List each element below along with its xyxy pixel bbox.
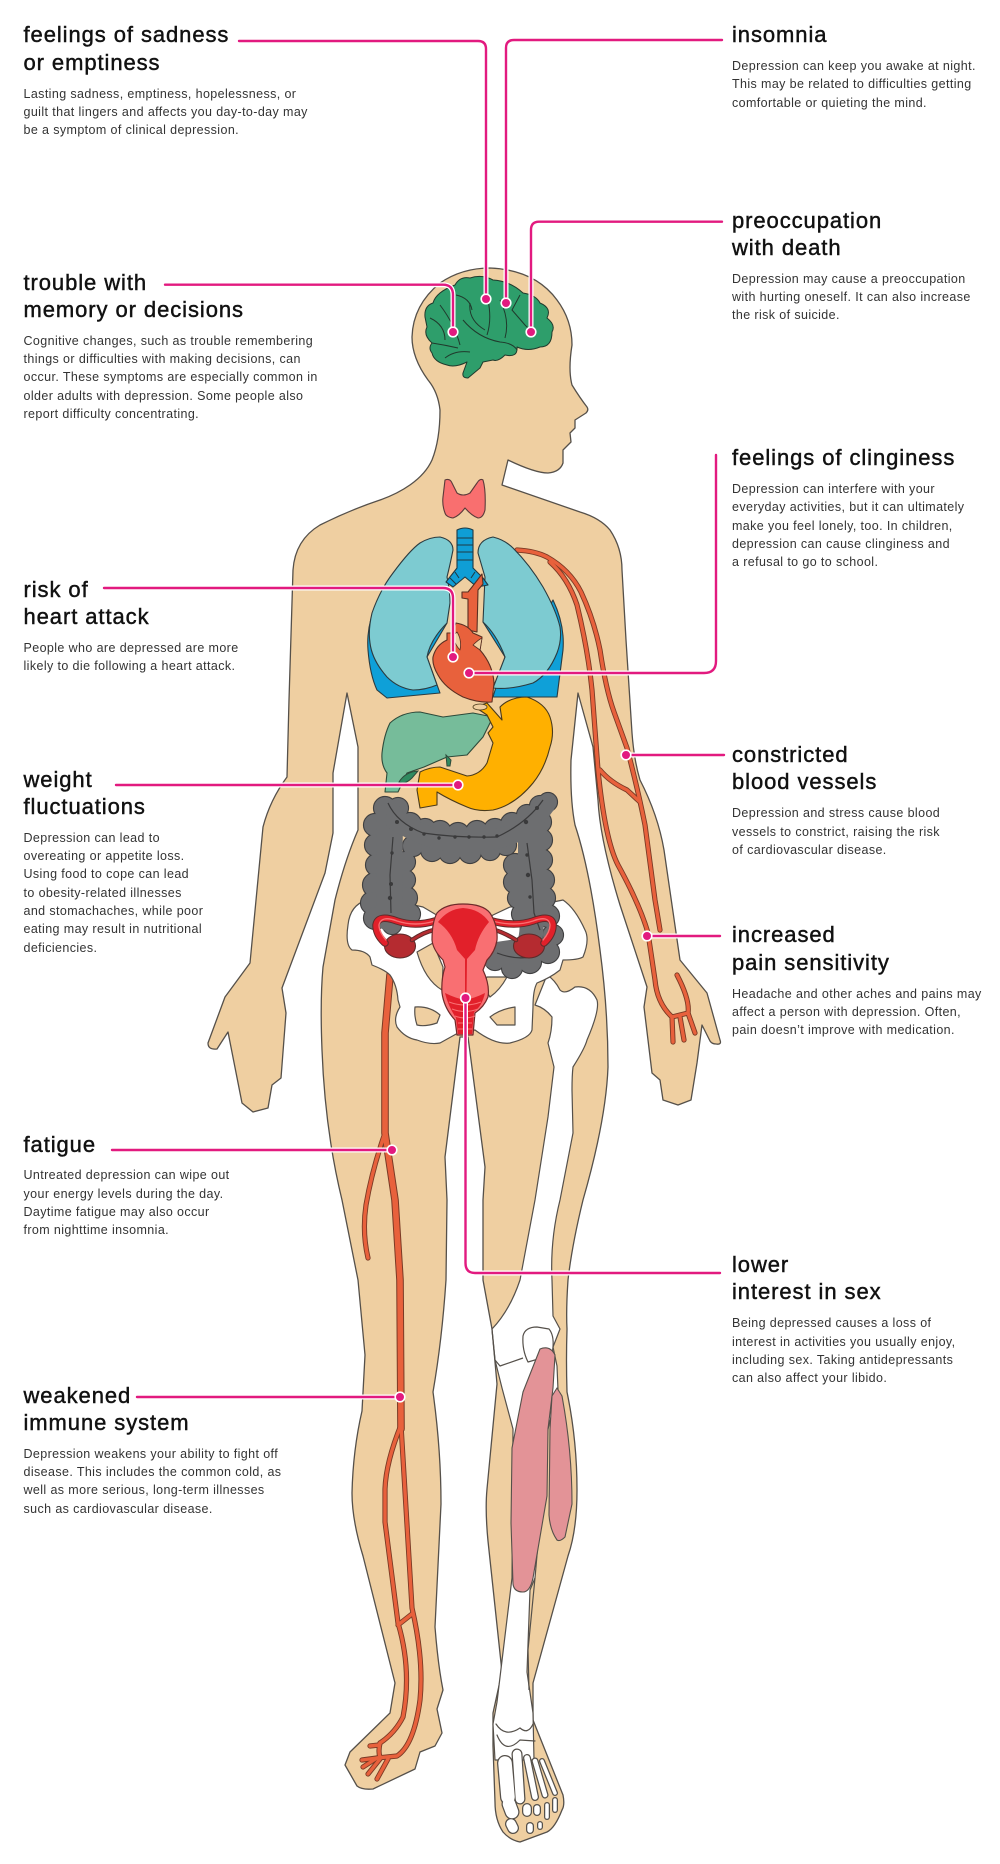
panel: risk of heart attack [24, 577, 239, 673]
description: Using food to cope can lead [24, 867, 189, 881]
brain [425, 276, 553, 378]
heart and great vessels [433, 574, 494, 702]
description: Depression can interfere with your [732, 482, 935, 496]
description [24, 1168, 230, 1237]
heading: with death [732, 235, 842, 260]
heading: lower [732, 1252, 789, 1277]
description: things or difficulties with making decisions, can [24, 352, 301, 366]
uterine cavity [438, 908, 489, 1000]
description: depression can cause clinginess and [732, 537, 950, 551]
description: everyday activities, but it can ultimately [732, 500, 964, 514]
heading: insomnia [732, 22, 827, 47]
left lung [369, 537, 453, 690]
description [24, 1447, 281, 1516]
panel: feelings of clinginess [732, 445, 964, 569]
stomach [417, 697, 552, 811]
description: overeating or appetite loss. [24, 849, 185, 863]
back of left lung [368, 600, 447, 698]
heading: interest in sex [732, 1279, 882, 1304]
description: Daytime fatigue may also occur [24, 1205, 210, 1219]
description: can also affect your libido. [732, 1371, 887, 1385]
description [24, 831, 203, 955]
heading: preoccupation [732, 208, 882, 233]
back of right lung [483, 600, 563, 697]
description: Depression may cause a preoccupation [732, 272, 966, 286]
heading [732, 742, 877, 794]
panel: fatigue [24, 1132, 230, 1237]
connector: feelings of clinginess [469, 455, 716, 673]
description: Being depressed causes a loss of [732, 1316, 931, 1330]
connector: fatigue [112, 1149, 392, 1151]
ovarian ligaments and fallopian tubes [376, 918, 553, 943]
connector: increased pain sensitivity [647, 935, 720, 937]
connector: trouble with memory [165, 285, 453, 332]
description: vessels to constrict, raising the risk [732, 824, 940, 838]
heading: constricted [732, 742, 848, 767]
description: a refusal to go to school. [732, 555, 878, 569]
heading: immune system [24, 1410, 190, 1435]
panel: increased pain sensitivity [732, 922, 982, 1037]
heading [24, 22, 229, 75]
panel: lower interest in sex [732, 1252, 956, 1385]
description: likely to die following a heart attack. [24, 659, 235, 673]
description: older adults with depression. Some people also [24, 389, 303, 403]
heading [732, 208, 882, 260]
description: of cardiovascular disease. [732, 843, 887, 857]
description: Depression weakens your ability to fight off [24, 1447, 278, 1461]
connector: weakened immune system [137, 1396, 400, 1398]
heading [23, 1383, 190, 1435]
heading: feelings of clinginess [732, 445, 955, 470]
thyroid [443, 479, 485, 518]
description [732, 482, 964, 569]
foot bones [496, 1724, 555, 1830]
description: to obesity-related illnesses [24, 886, 182, 900]
ovary left [384, 934, 416, 958]
arm and leg blood vessels [362, 550, 695, 1779]
connector: risk of heart attack [104, 588, 453, 657]
liver divide and gallbladder [399, 755, 451, 783]
body silhouette [208, 268, 720, 1842]
connector: feelings of sadness [239, 41, 486, 299]
ovary right [514, 934, 544, 958]
description: well as more serious, long-term illnesses [24, 1483, 265, 1497]
description: Cognitive changes, such as trouble remembering [24, 334, 313, 348]
description: make you feel lonely, too. In children, [732, 519, 953, 533]
description [24, 641, 239, 673]
panel: preoccupation with death [732, 208, 971, 322]
right lung [478, 537, 561, 688]
description [732, 59, 976, 110]
cervix [445, 993, 485, 1034]
uterus and ovaries [376, 904, 553, 1035]
description: such as cardiovascular disease. [24, 1502, 213, 1516]
description: affect a person with depression. Often, [732, 1005, 961, 1019]
description: Untreated depression can wipe out [24, 1168, 230, 1182]
description: report difficulty concentrating. [24, 407, 199, 421]
heading: fatigue [24, 1132, 96, 1157]
heading: heart attack [24, 604, 150, 629]
description: Lasting sadness, emptiness, hopelessness, or [24, 87, 296, 101]
description: occur. These symptoms are especially common in [24, 370, 318, 384]
colon [361, 793, 563, 978]
description: the risk of suicide. [732, 308, 840, 322]
connector lines [104, 40, 724, 1397]
leg muscles [511, 1348, 572, 1592]
heading: pain sensitivity [732, 950, 890, 975]
description [24, 334, 318, 421]
connector: lower interest in sex [466, 998, 720, 1273]
description: guilt that lingers and affects you day-to-day may [24, 105, 308, 119]
description: including sex. Taking antidepressants [732, 1353, 953, 1367]
description: This may be related to difficulties getting [732, 77, 972, 91]
panel: insomnia [732, 22, 976, 110]
esophagus cap [473, 704, 487, 710]
description [732, 806, 940, 857]
heading: or emptiness [24, 50, 160, 75]
heading: trouble with [24, 270, 147, 295]
pelvis [347, 900, 587, 1044]
heading: feelings of sadness [24, 22, 229, 47]
heading: weakened [24, 1383, 131, 1408]
heading: blood vessels [732, 769, 877, 794]
connector: insomnia [506, 40, 722, 303]
description: your energy levels during the day. [24, 1187, 223, 1201]
heading: risk of [24, 577, 89, 602]
description [732, 987, 982, 1037]
description [24, 87, 308, 137]
panel: weakened immune system [23, 1383, 281, 1516]
description: interest in activities you usually enjoy, [732, 1334, 956, 1348]
connector: preoccupation with death [531, 222, 722, 332]
lungs [368, 537, 563, 698]
heading [24, 577, 150, 629]
panel: constricted blood vessels [732, 742, 940, 857]
leg bones: femur, knee and tibia [492, 975, 598, 1760]
heading [23, 767, 146, 819]
heading [732, 922, 890, 975]
description: deficiencies. [24, 941, 97, 955]
panel: trouble with memory [24, 270, 318, 421]
heading: weight [24, 767, 93, 792]
heading: memory or decisions [24, 297, 244, 322]
heading [732, 1252, 882, 1304]
description: from nighttime insomnia. [24, 1223, 169, 1237]
heading: fluctuations [24, 794, 146, 819]
connector: weight fluctuations [116, 784, 458, 786]
heading: increased [732, 922, 836, 947]
description: disease. This includes the common cold, as [24, 1465, 281, 1479]
panel: weight fluctuations [23, 767, 203, 955]
description: People who are depressed are more [24, 641, 239, 655]
description: comfortable or quieting the mind. [732, 96, 927, 110]
description: Headache and other aches and pains may [732, 987, 982, 1001]
panel: feelings of sadness [24, 22, 308, 137]
heading [24, 270, 244, 322]
liver [382, 712, 493, 792]
connector: constricted blood vessels [626, 754, 724, 756]
description: Depression can lead to [24, 831, 160, 845]
description: Depression and stress cause blood [732, 806, 940, 820]
description [732, 272, 971, 322]
description: pain doesn’t improve with medication. [732, 1023, 955, 1037]
trachea [446, 528, 488, 587]
description: and stomachaches, while poor [24, 904, 203, 918]
description: eating may result in nutritional [24, 922, 202, 936]
connector end dots [387, 294, 652, 1402]
uterus body [432, 904, 497, 1035]
description: Depression can keep you awake at night. [732, 59, 976, 73]
description: with hurting oneself. It can also increase [732, 290, 971, 304]
description [732, 1316, 956, 1385]
description: be a symptom of clinical depression. [24, 123, 239, 137]
